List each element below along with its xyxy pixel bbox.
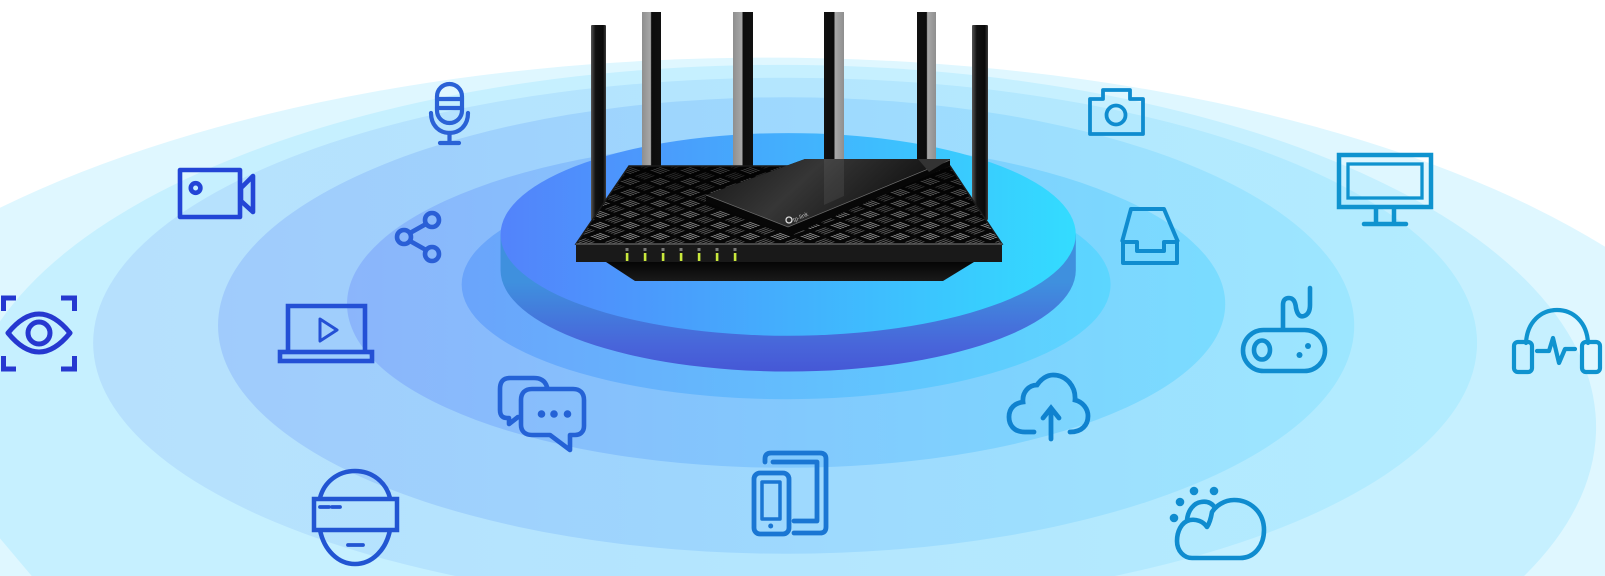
logo: tp-link xyxy=(792,211,810,224)
icon: share xyxy=(397,213,439,261)
LED symbols xyxy=(626,248,736,251)
router cover plate xyxy=(706,159,950,236)
icon: game controller xyxy=(1243,288,1325,371)
router xyxy=(576,12,1002,281)
icon: sun and cloud weather xyxy=(1170,487,1264,558)
router front panel xyxy=(576,244,1002,262)
antennas xyxy=(591,12,988,220)
icon: chat bubbles xyxy=(500,378,584,450)
icon: monitor xyxy=(1339,155,1431,224)
icon: cloud upload xyxy=(1009,375,1088,439)
router top grille xyxy=(576,166,1002,244)
icon: inbox tray xyxy=(1122,209,1178,263)
router underside xyxy=(606,262,974,281)
icon: photo camera xyxy=(1090,90,1143,134)
icon: video camera xyxy=(180,170,253,217)
icon: headphones with pulse xyxy=(1514,310,1600,372)
logo xyxy=(786,211,810,224)
status LEDs xyxy=(626,253,736,261)
icon: phone and tablet xyxy=(754,453,826,534)
icon: VR headset head xyxy=(314,471,397,564)
icon: laptop with play button xyxy=(280,306,372,361)
platform disc xyxy=(501,133,1076,372)
icon: eye with focus brackets xyxy=(4,298,74,369)
icon: microphone xyxy=(431,84,468,143)
